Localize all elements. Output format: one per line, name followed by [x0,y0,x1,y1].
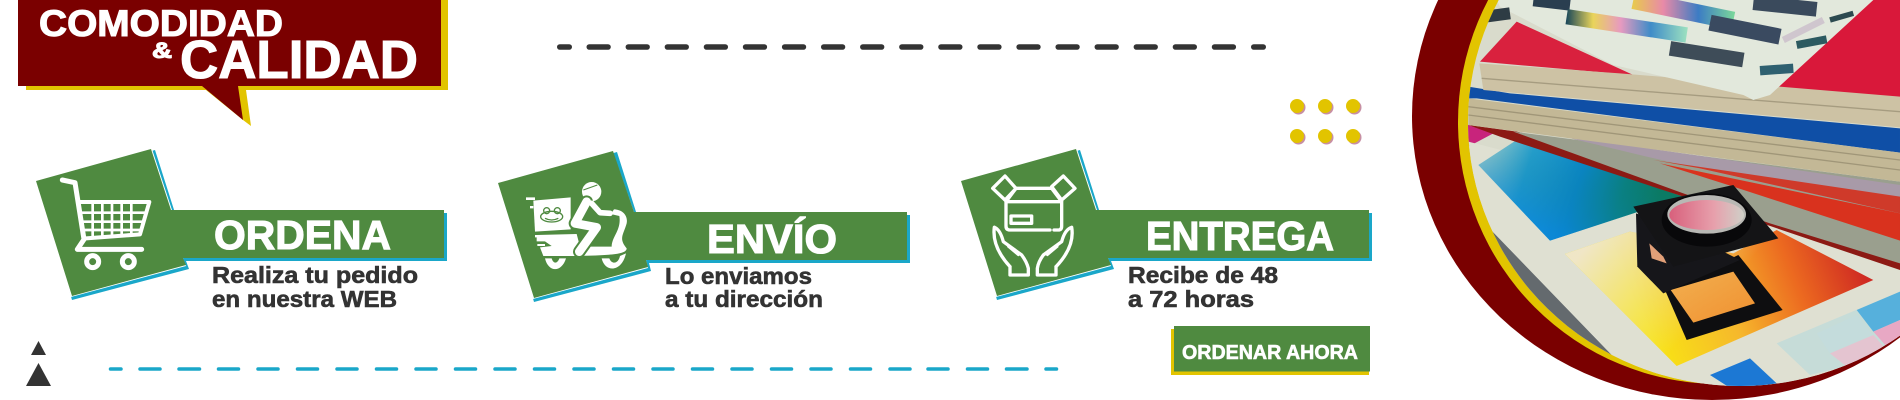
photo: color charts and books [1468,0,1900,386]
icon: shopping cart [62,180,149,268]
step description: entrega: a 72 horas [1128,286,1254,312]
panel: entrega [961,149,1372,312]
step description: entrega: Recibe de 48 [1128,262,1278,288]
yellow ring [1458,0,1900,384]
heading ampersand: & [152,38,172,63]
heading line: CALIDAD: CALIDAD [180,30,418,90]
button: ordenar ahora: ORDENAR AHORA [1182,342,1358,364]
step title: ENVIO: ENVÍO [707,216,837,262]
icon: box held by hands [993,176,1075,275]
blue book pages [1468,98,1900,182]
lower book stack [1468,125,1900,270]
red book cover [1480,22,1633,75]
pastel swatches [1777,292,1900,375]
step description: envio: Lo enviamos [665,263,812,289]
cyan color patch [1478,140,1683,241]
step title: ORDENA: ORDENA [214,212,391,258]
warm color patch [1565,230,1873,366]
speech bubble heading [18,0,448,126]
step description: envio: a tu dirección [665,286,823,312]
blue book [1468,87,1900,153]
maroon circle [1412,0,1900,400]
loupe [1633,185,1783,340]
icon: stacked triangles [26,341,51,386]
step description: ordena: Realiza tu pedido [212,262,418,288]
red book pages [1479,63,1900,127]
button: ordenar ahora [1171,326,1370,375]
step title: ENTREGA: ENTREGA [1146,213,1334,259]
step description: envio [665,263,823,312]
icon: delivery scooter [526,182,627,269]
blue swatch [1710,358,1777,386]
panel: envio [498,151,910,312]
top dashed line [560,44,1263,50]
step description: entrega [1128,262,1278,312]
heading line: COMODIDAD: COMODIDAD [39,3,283,44]
panel: ordena [36,149,447,312]
bottom dashed line [110,367,1056,371]
step description: ordena: en nuestra WEB [212,286,397,312]
photo circle [1400,0,1900,400]
icon: frog logo [541,208,563,222]
decorative dots grid [1290,99,1362,144]
step description: ordena [212,262,418,312]
swatch fan [1497,0,1873,100]
